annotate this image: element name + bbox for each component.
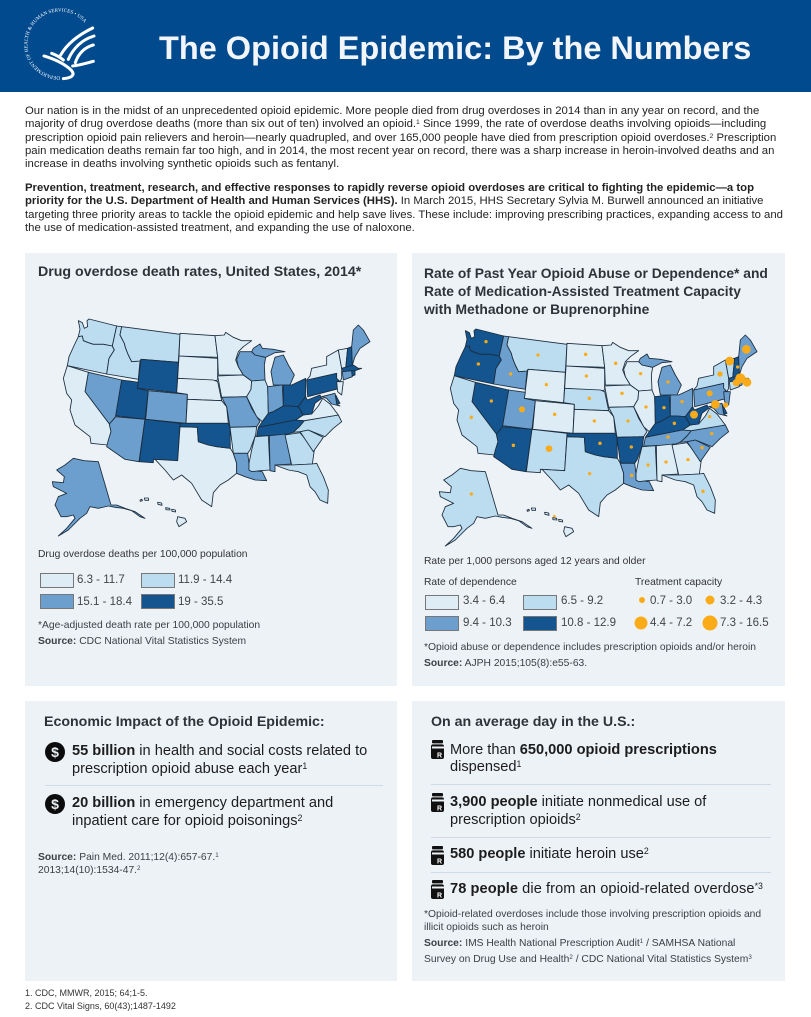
priority paragraph: targeting three priority areas to tackle the opioid epidemic and help save lives. These include: improving prescribing practices, expanding access to and xyxy=(25,209,783,221)
legend: dependence rate and treatment capacity xyxy=(424,556,769,631)
stat: 20 billion xyxy=(72,795,333,829)
note and source: death rates: *Age-adjusted death rate per 100,000 population xyxy=(38,620,260,631)
header band xyxy=(0,0,811,92)
heading: abuse and treatment: Rate of Past Year Opioid Abuse or Dependence* and xyxy=(424,265,768,281)
priority paragraph: Prevention, treatment, research, and effective responses to rapidly reverse opioid overdoses are critical to fighting the epidemic—a top xyxy=(25,182,754,194)
logo: HHS seal: DEPARTMENT OF HEALTH & HUMAN SERVICES • USA xyxy=(24,8,86,80)
legend: dependence rate and treatment capacity: 7.3 - 16.5 xyxy=(720,617,769,629)
stat: 78 people: 78 people die from an opioid-related overdose*3 xyxy=(450,881,763,897)
legend: dependence rate and treatment capacity: 10.8 - 12.9 xyxy=(561,617,616,629)
intro paragraph: majority of drug overdose deaths (more than six out of ten) involved an opioid.1 Since 1999, the rate of overdose deaths involving opioids—including xyxy=(25,118,766,130)
icon: dollar coin: $ xyxy=(51,744,59,760)
stat: 3,900 people xyxy=(450,794,706,828)
stat: 20 billion: inpatient care for opioid poisonings2 xyxy=(72,813,302,829)
panel: economic impact xyxy=(25,701,397,981)
icon: pill bottle xyxy=(431,793,444,812)
heading: abuse and treatment: with Methadone or Buprenorphine xyxy=(424,301,649,317)
icon: pill bottle xyxy=(431,880,444,899)
note and source: dependence: *Opioid abuse or dependence includes prescription opioids and/or heroin xyxy=(424,642,756,653)
intro paragraph: increase in deaths involving synthetic opioids such as fentanyl. xyxy=(25,158,339,170)
heading: average day: On an average day in the U.S.: xyxy=(431,714,635,730)
priority paragraph: priority for the U.S. Department of Health and Human Services (HHS). In March 2015, HHS Secretary Sylvia M. Burwell announced an initiative xyxy=(25,195,763,207)
legend: death rate key: 11.9 - 14.4 xyxy=(178,574,232,586)
icon: dollar coin xyxy=(45,794,65,814)
legend: dependence rate and treatment capacity: 6.5 - 9.2 xyxy=(561,595,603,607)
legend: dependence rate and treatment capacity: 9.4 - 10.3 xyxy=(463,617,512,629)
legend: dependence rate and treatment capacity: 3.2 - 4.3 xyxy=(720,595,762,607)
legend: death rate key xyxy=(38,549,248,609)
note and source: average day: *Opioid-related overdoses include those involving prescription opioids and xyxy=(424,909,761,920)
title: The Opioid Epidemic: By the Numbers xyxy=(159,30,751,66)
intro paragraph: Our nation is in the midst of an unprecedented opioid epidemic. More people died from drug overdoses in 2014 than in any year on record, and the xyxy=(25,105,759,117)
references: 1. CDC, MMWR, 2015; 64;1-5. xyxy=(25,988,148,998)
legend: death rate key: Drug overdose deaths per 100,000 population xyxy=(38,549,248,560)
treatment capacity dots xyxy=(470,340,751,518)
stat: prescriptions: More than 650,000 opioid prescriptions xyxy=(450,742,717,758)
note and source: death rates xyxy=(38,620,260,647)
icon: dollar coin: $ xyxy=(51,796,59,812)
legend: dependence rate and treatment capacity: 4.4 - 7.2 xyxy=(650,617,692,629)
note and source: average day: Survey on Drug Use and Health2 / CDC National Vital Statistics System3 xyxy=(424,954,752,965)
stat: 55 billion: prescription opioid abuse each year1 xyxy=(72,761,307,777)
panel: drug overdose death rates xyxy=(25,253,397,686)
panel: past year opioid abuse and treatment capacity xyxy=(412,253,785,686)
map: overdose death rates by state xyxy=(52,318,370,536)
icon: dollar coin xyxy=(45,742,65,762)
panel: average day xyxy=(412,701,785,981)
stat: 3,900 people: prescription opioids2 xyxy=(450,812,581,828)
legend: dependence rate and treatment capacity: Rate per 1,000 persons aged 12 years and older xyxy=(424,556,646,567)
note and source: death rates: Source: CDC National Vital Statistics System xyxy=(38,636,246,647)
stat: 55 billion xyxy=(72,743,367,777)
legend: dependence rate and treatment capacity: Treatment capacity xyxy=(635,577,722,588)
intro paragraph: prescription opioid pain relievers and heroin—nearly quadrupled, and over 165,000 people have died from prescription opioid overdoses.2 Prescription xyxy=(25,132,776,144)
references: 2. CDC Vital Signs, 60(43);1487-1492 xyxy=(25,1001,176,1011)
heading: abuse and treatment: Rate of Medication-Assisted Treatment Capacity xyxy=(424,283,741,299)
source: economic impact: 2013;14(10):1534-47.2 xyxy=(38,865,140,876)
heading: economic impact: Economic Impact of the Opioid Epidemic: xyxy=(44,714,325,730)
note and source: average day xyxy=(424,909,761,965)
references xyxy=(25,988,176,1011)
legend: dependence rate and treatment capacity: 3.4 - 6.4 xyxy=(463,595,505,607)
priority paragraph xyxy=(25,182,783,234)
stat: 55 billion: 55 billion in health and social costs related to xyxy=(72,743,367,759)
source: economic impact: Source: Pain Med. 2011;12(4):657-67.1 xyxy=(38,852,219,863)
stat: 20 billion: 20 billion in emergency department and xyxy=(72,795,333,811)
heading: death rates: Drug overdose death rates, United States, 2014* xyxy=(38,264,361,280)
intro paragraph xyxy=(25,105,776,170)
legend: dependence rate and treatment capacity: 0.7 - 3.0 xyxy=(650,595,692,607)
note and source: dependence: Source: AJPH 2015;105(8):e55-63. xyxy=(424,658,587,669)
stat: prescriptions: dispensed1 xyxy=(450,759,521,775)
intro paragraph: pain medication deaths remain far too high, and in 2014, the most recent year on record, there was a sharp increase in heroin-involved deaths and an xyxy=(25,145,774,157)
icon: pill bottle xyxy=(431,740,444,759)
stat: prescriptions xyxy=(450,742,717,775)
legend: dependence rate and treatment capacity: Rate of dependence xyxy=(424,577,517,588)
map: dependence rate by state with treatment capacity dots xyxy=(438,328,758,546)
source: economic impact xyxy=(38,852,219,876)
icon: pill bottle xyxy=(431,846,444,865)
stat: 580 people: 580 people initiate heroin use2 xyxy=(450,846,649,862)
legend: death rate key: 15.1 - 18.4 xyxy=(77,596,132,608)
note and source: average day: illicit opioids such as heroin xyxy=(424,922,549,933)
heading: abuse and treatment xyxy=(424,265,768,317)
legend: death rate key: 6.3 - 11.7 xyxy=(77,574,125,586)
note and source: average day: Source: IMS Health National Prescription Audit1 / SAMHSA National xyxy=(424,938,735,949)
priority paragraph: the use of medication-assisted treatment, and expanding the use of naloxone. xyxy=(25,222,415,234)
legend: death rate key: 19 - 35.5 xyxy=(178,596,223,608)
note and source: dependence xyxy=(424,642,756,669)
stat: 3,900 people: 3,900 people initiate nonmedical use of xyxy=(450,794,706,810)
